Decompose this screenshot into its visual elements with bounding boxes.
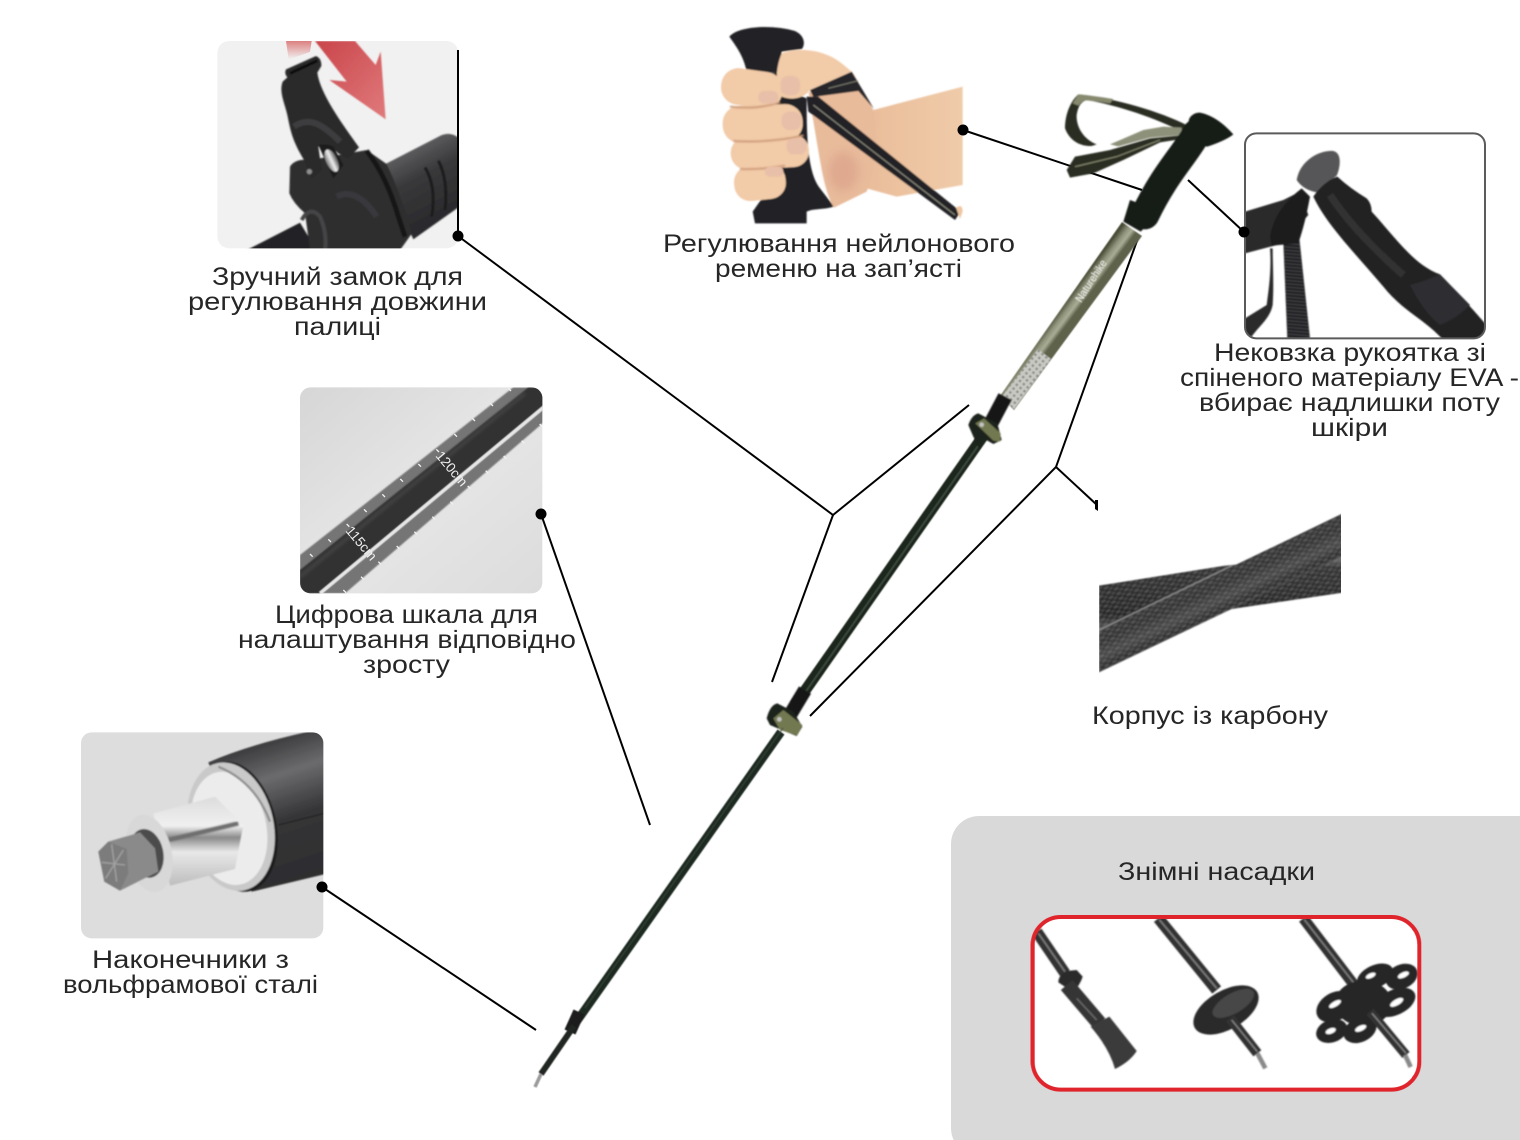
ferrule xyxy=(570,1012,579,1032)
caption: scale: зросту xyxy=(363,651,451,679)
brand mark: Naturehike xyxy=(1073,258,1110,305)
scale labels: 120cm xyxy=(433,448,471,489)
strap loop and foam grip xyxy=(1065,94,1233,232)
caption: lock xyxy=(188,263,487,341)
leader dots xyxy=(316,124,1250,892)
caption: carbon body: Корпус із карбону xyxy=(1092,702,1329,730)
steel tip xyxy=(541,1026,574,1074)
caption: grip: спіненого матеріалу EVA - xyxy=(1180,364,1519,392)
panel: carbon body photo xyxy=(1099,512,1345,672)
caption: lock: регулювання довжини xyxy=(188,288,487,316)
caption: grip: шкіри xyxy=(1311,414,1388,442)
upper section xyxy=(1000,222,1142,410)
caption: scale xyxy=(238,601,576,679)
middle section xyxy=(795,432,986,705)
fingers xyxy=(719,50,852,203)
panel: removable tips frame xyxy=(1033,917,1422,1090)
clamp on the tube xyxy=(247,56,459,250)
caption: wrist strap xyxy=(663,230,1015,283)
caption: grip xyxy=(1180,339,1519,442)
caption: wrist strap: Регулювання нейлонового xyxy=(663,230,1015,258)
icon: rubber tip xyxy=(1037,932,1137,1069)
panel: length lock xyxy=(217,41,459,250)
caption: grip: Нековзка рукоятка зі xyxy=(1214,339,1486,367)
caption: lock: Зручний замок для xyxy=(212,263,463,291)
icon: red arrow xyxy=(315,41,386,119)
leader lines xyxy=(322,50,1244,1030)
panel: foam grip photo xyxy=(1245,133,1485,340)
caption: tungsten tips xyxy=(63,946,318,999)
panel: removable tips background xyxy=(951,816,1520,1140)
caption: scale: налаштування відповідно xyxy=(238,626,576,654)
grip held in hand xyxy=(729,27,834,223)
caption: scale: Цифрова шкала для xyxy=(275,601,538,629)
caption: grip: вбирає надлишки поту xyxy=(1199,389,1501,417)
icon: snow basket xyxy=(1303,918,1422,1067)
caption: tungsten tips: Наконечники з xyxy=(92,946,289,974)
panel: tungsten tip photo xyxy=(81,732,328,938)
clamps and lower section xyxy=(767,397,1005,736)
caption: wrist strap: ременю на зап’ясті xyxy=(715,255,962,283)
caption: lock: палиці xyxy=(294,313,381,341)
scale labels xyxy=(346,452,466,561)
icon: disc basket xyxy=(1158,918,1267,1068)
caption: tungsten tips: вольфрамової сталі xyxy=(63,971,318,999)
trekking pole xyxy=(535,94,1233,1087)
panel: numeric scale photo xyxy=(300,387,548,593)
scale labels: 115cm xyxy=(343,523,380,564)
heading: removable tips: Знімні насадки xyxy=(1118,858,1315,886)
panel: wrist strap photo xyxy=(719,27,963,223)
